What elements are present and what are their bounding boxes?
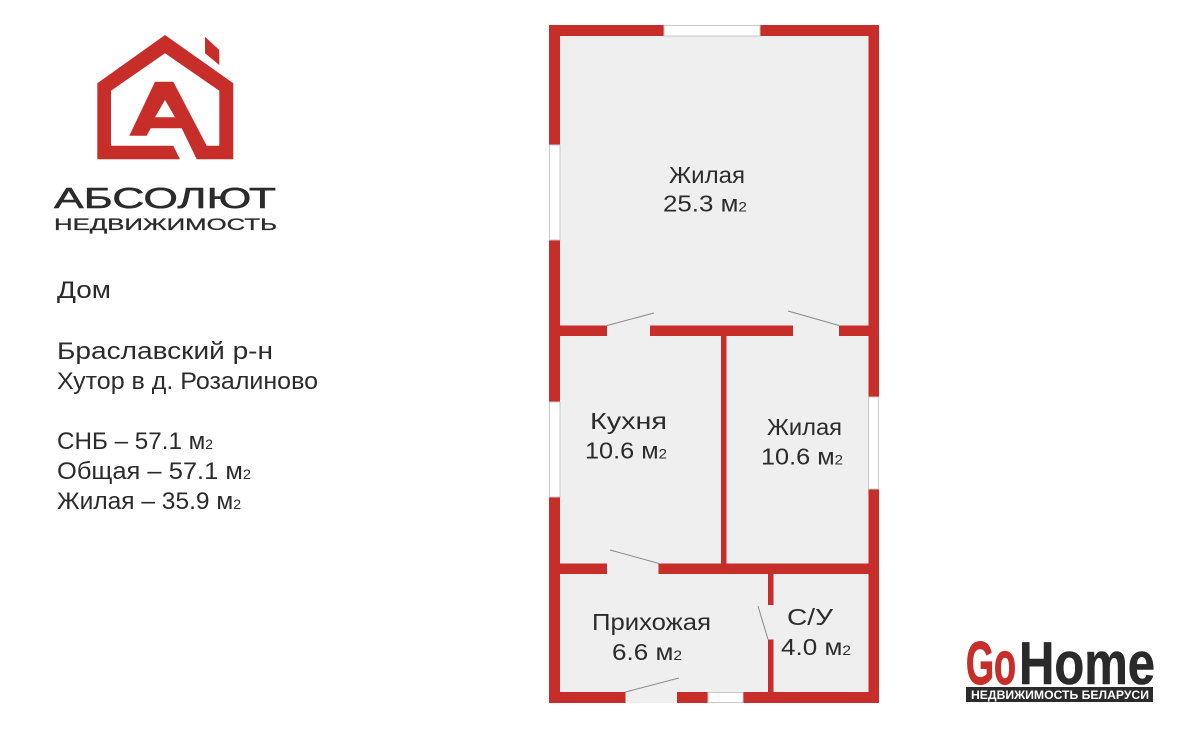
room label: living room 10.6 bbox=[761, 414, 843, 470]
logo subtitle: НЕДВИЖИМОСТЬ bbox=[54, 215, 277, 234]
tagline text: НЕДВИЖИМОСТЬ БЕЛАРУСИ bbox=[971, 688, 1149, 702]
room label: bathroom: 4.0 м 2 bbox=[781, 634, 851, 660]
logo wordmark: АБСОЛЮТ bbox=[54, 183, 276, 215]
entrance door opening bbox=[626, 692, 677, 703]
red walls bbox=[549, 25, 879, 703]
property details text block: СНБ – 57.1 м2 bbox=[57, 428, 213, 455]
windows bbox=[550, 26, 878, 702]
tagline bar bbox=[966, 687, 1153, 702]
room label: kitchen: 10.6 м 2 bbox=[585, 438, 667, 464]
room label: hallway bbox=[592, 609, 711, 665]
room label: hallway: Прихожая bbox=[592, 609, 711, 635]
property details text block: Дом bbox=[57, 277, 111, 304]
property details text block: Браславский р-н bbox=[57, 338, 273, 365]
property details text block: Хутор в д. Розалиново bbox=[57, 368, 318, 395]
icon: house with letter A bbox=[97, 35, 233, 159]
property details text block: Жилая – 35.9 м2 bbox=[57, 488, 241, 515]
room floors bbox=[555, 30, 874, 698]
room label: bathroom: С/У bbox=[787, 604, 834, 630]
room label: living room 25.3 bbox=[663, 162, 747, 216]
room label: bathroom bbox=[781, 604, 851, 660]
room label: hallway: 6.6 м 2 bbox=[612, 639, 682, 665]
property details text block: Общая – 57.1 м 2 bbox=[57, 458, 251, 485]
logo: Absolute real estate bbox=[54, 35, 277, 234]
GoHome wordmark: Go: Go bbox=[966, 630, 1016, 697]
room label: living room 10.6: 10.6 м 2 bbox=[761, 444, 843, 470]
room label: kitchen bbox=[585, 408, 667, 464]
room label: living room 25.3: 25.3 м 2 bbox=[663, 190, 747, 216]
room label: living room 25.3: Жилая bbox=[669, 162, 745, 188]
room label: living room 10.6: Жилая bbox=[767, 414, 842, 440]
logo: GoHome bbox=[966, 630, 1155, 702]
property details text block bbox=[57, 277, 318, 515]
floor plan bbox=[549, 25, 879, 703]
GoHome wordmark: Home: Home bbox=[1019, 630, 1155, 697]
door leaves bbox=[607, 311, 839, 692]
room label: kitchen: Кухня bbox=[590, 408, 667, 434]
